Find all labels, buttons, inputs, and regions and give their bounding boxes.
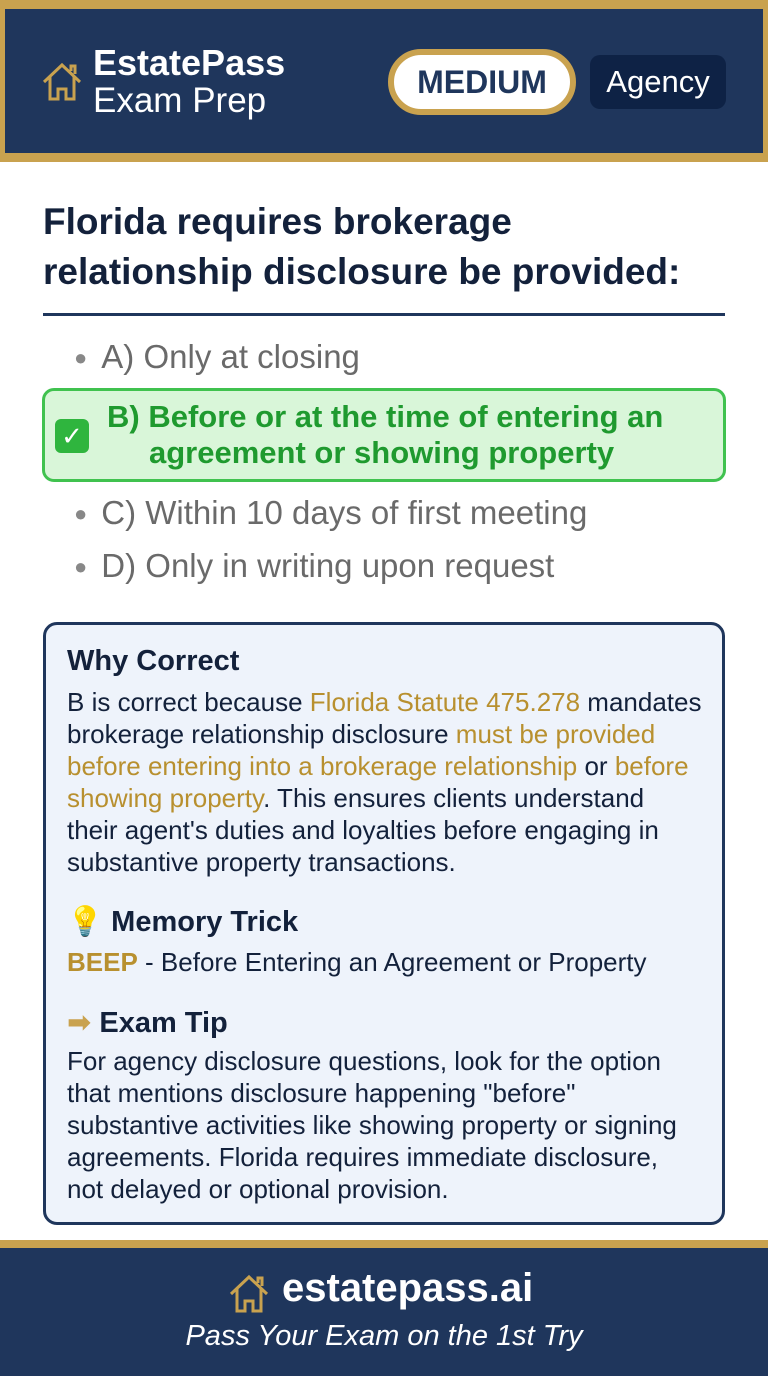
heading: exam tip: ➡ Exam Tip <box>67 1007 228 1039</box>
text: explanation: substantive property transactions. <box>67 847 456 877</box>
question heading: relationship disclosure be provided: <box>43 251 680 292</box>
question heading <box>43 201 680 292</box>
footer <box>0 1240 768 1376</box>
text: explanation: brokerage relationship disclosure must be provided <box>67 719 655 749</box>
icon: house <box>43 63 81 100</box>
option A: ● A) Only at closing <box>74 338 360 375</box>
text: exam tip: agreements. Florida requires immediate disclosure, <box>67 1142 658 1172</box>
question heading: Florida requires brokerage <box>43 201 512 242</box>
text: exam tip <box>67 1046 677 1204</box>
text: exam tip: that mentions disclosure happening "before" <box>67 1078 575 1108</box>
text: explanation: showing property. This ensures clients understand <box>67 783 644 813</box>
text: explanation: their agent's duties and loyalties before engaging in <box>67 815 659 845</box>
text: exam tip: For agency disclosure questions, look for the option <box>67 1046 661 1076</box>
footer logo: estatepass.ai <box>282 1266 533 1310</box>
icon: check <box>55 419 89 453</box>
option B correct: B) Before or at the time of entering an <box>107 399 663 434</box>
heading: why correct: Why Correct <box>67 645 239 677</box>
text: exam tip: substantive activities like showing property or signing <box>67 1110 677 1140</box>
badge: difficulty: MEDIUM <box>417 64 547 100</box>
badge: topic <box>590 55 726 109</box>
header <box>0 0 768 162</box>
text: memory trick: BEEP - Before Entering an Agreement or Property <box>67 947 647 977</box>
option B correct: agreement or showing property <box>149 435 614 470</box>
icon: check: ✓ <box>61 421 83 451</box>
text: exam tip: not delayed or optional provision. <box>67 1174 449 1204</box>
tagline: Pass Your Exam on the 1st Try <box>185 1320 583 1352</box>
logo text <box>93 42 285 120</box>
panel: explanation <box>43 622 725 1225</box>
badge: difficulty <box>388 49 576 115</box>
option B correct <box>42 388 726 482</box>
text: explanation: before entering into a brokerage relationship or before <box>67 751 689 781</box>
option C: ● C) Within 10 days of first meeting <box>74 494 587 531</box>
logo text: Exam Prep <box>93 81 266 120</box>
badge: topic: Agency <box>606 64 710 99</box>
option D: ● D) Only in writing upon request <box>74 547 554 584</box>
text: explanation <box>67 687 701 877</box>
logo text: EstatePass <box>93 42 285 83</box>
heading: memory trick: 💡 Memory Trick <box>67 906 298 938</box>
text: explanation: B is correct because Florida Statute 475.278 mandates <box>67 687 701 717</box>
